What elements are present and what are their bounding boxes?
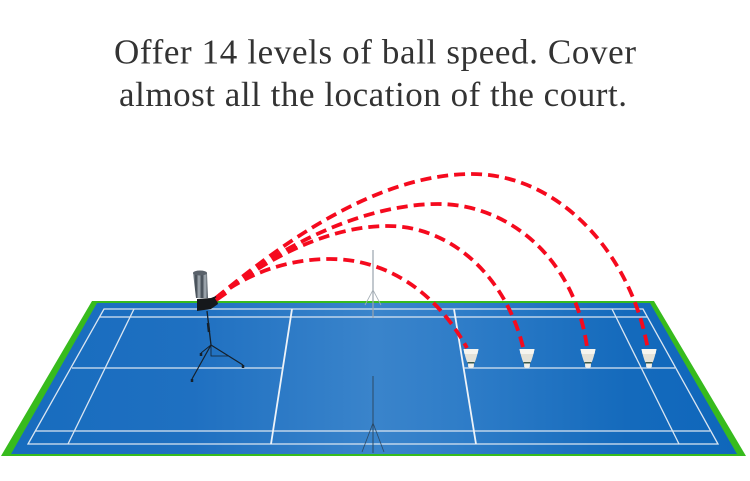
court blue surface: [11, 303, 737, 454]
title: almost all the location of the court.: [119, 75, 627, 114]
ball machine: [192, 270, 243, 382]
badminton court: [1, 301, 746, 456]
title: [114, 32, 636, 114]
net posts: [362, 250, 384, 453]
machine hopper: [193, 270, 208, 298]
shuttlecocks: [464, 349, 656, 368]
shuttle trajectories: [216, 174, 648, 350]
title: Offer 14 levels of ball speed. Cover: [114, 32, 636, 72]
court lines: [28, 309, 718, 444]
machine nozzle: [216, 293, 226, 300]
tripod stand: [192, 311, 243, 382]
machine body: [197, 296, 218, 311]
far net post: [365, 250, 381, 318]
near net post: [362, 376, 384, 453]
court green border: [1, 301, 746, 456]
